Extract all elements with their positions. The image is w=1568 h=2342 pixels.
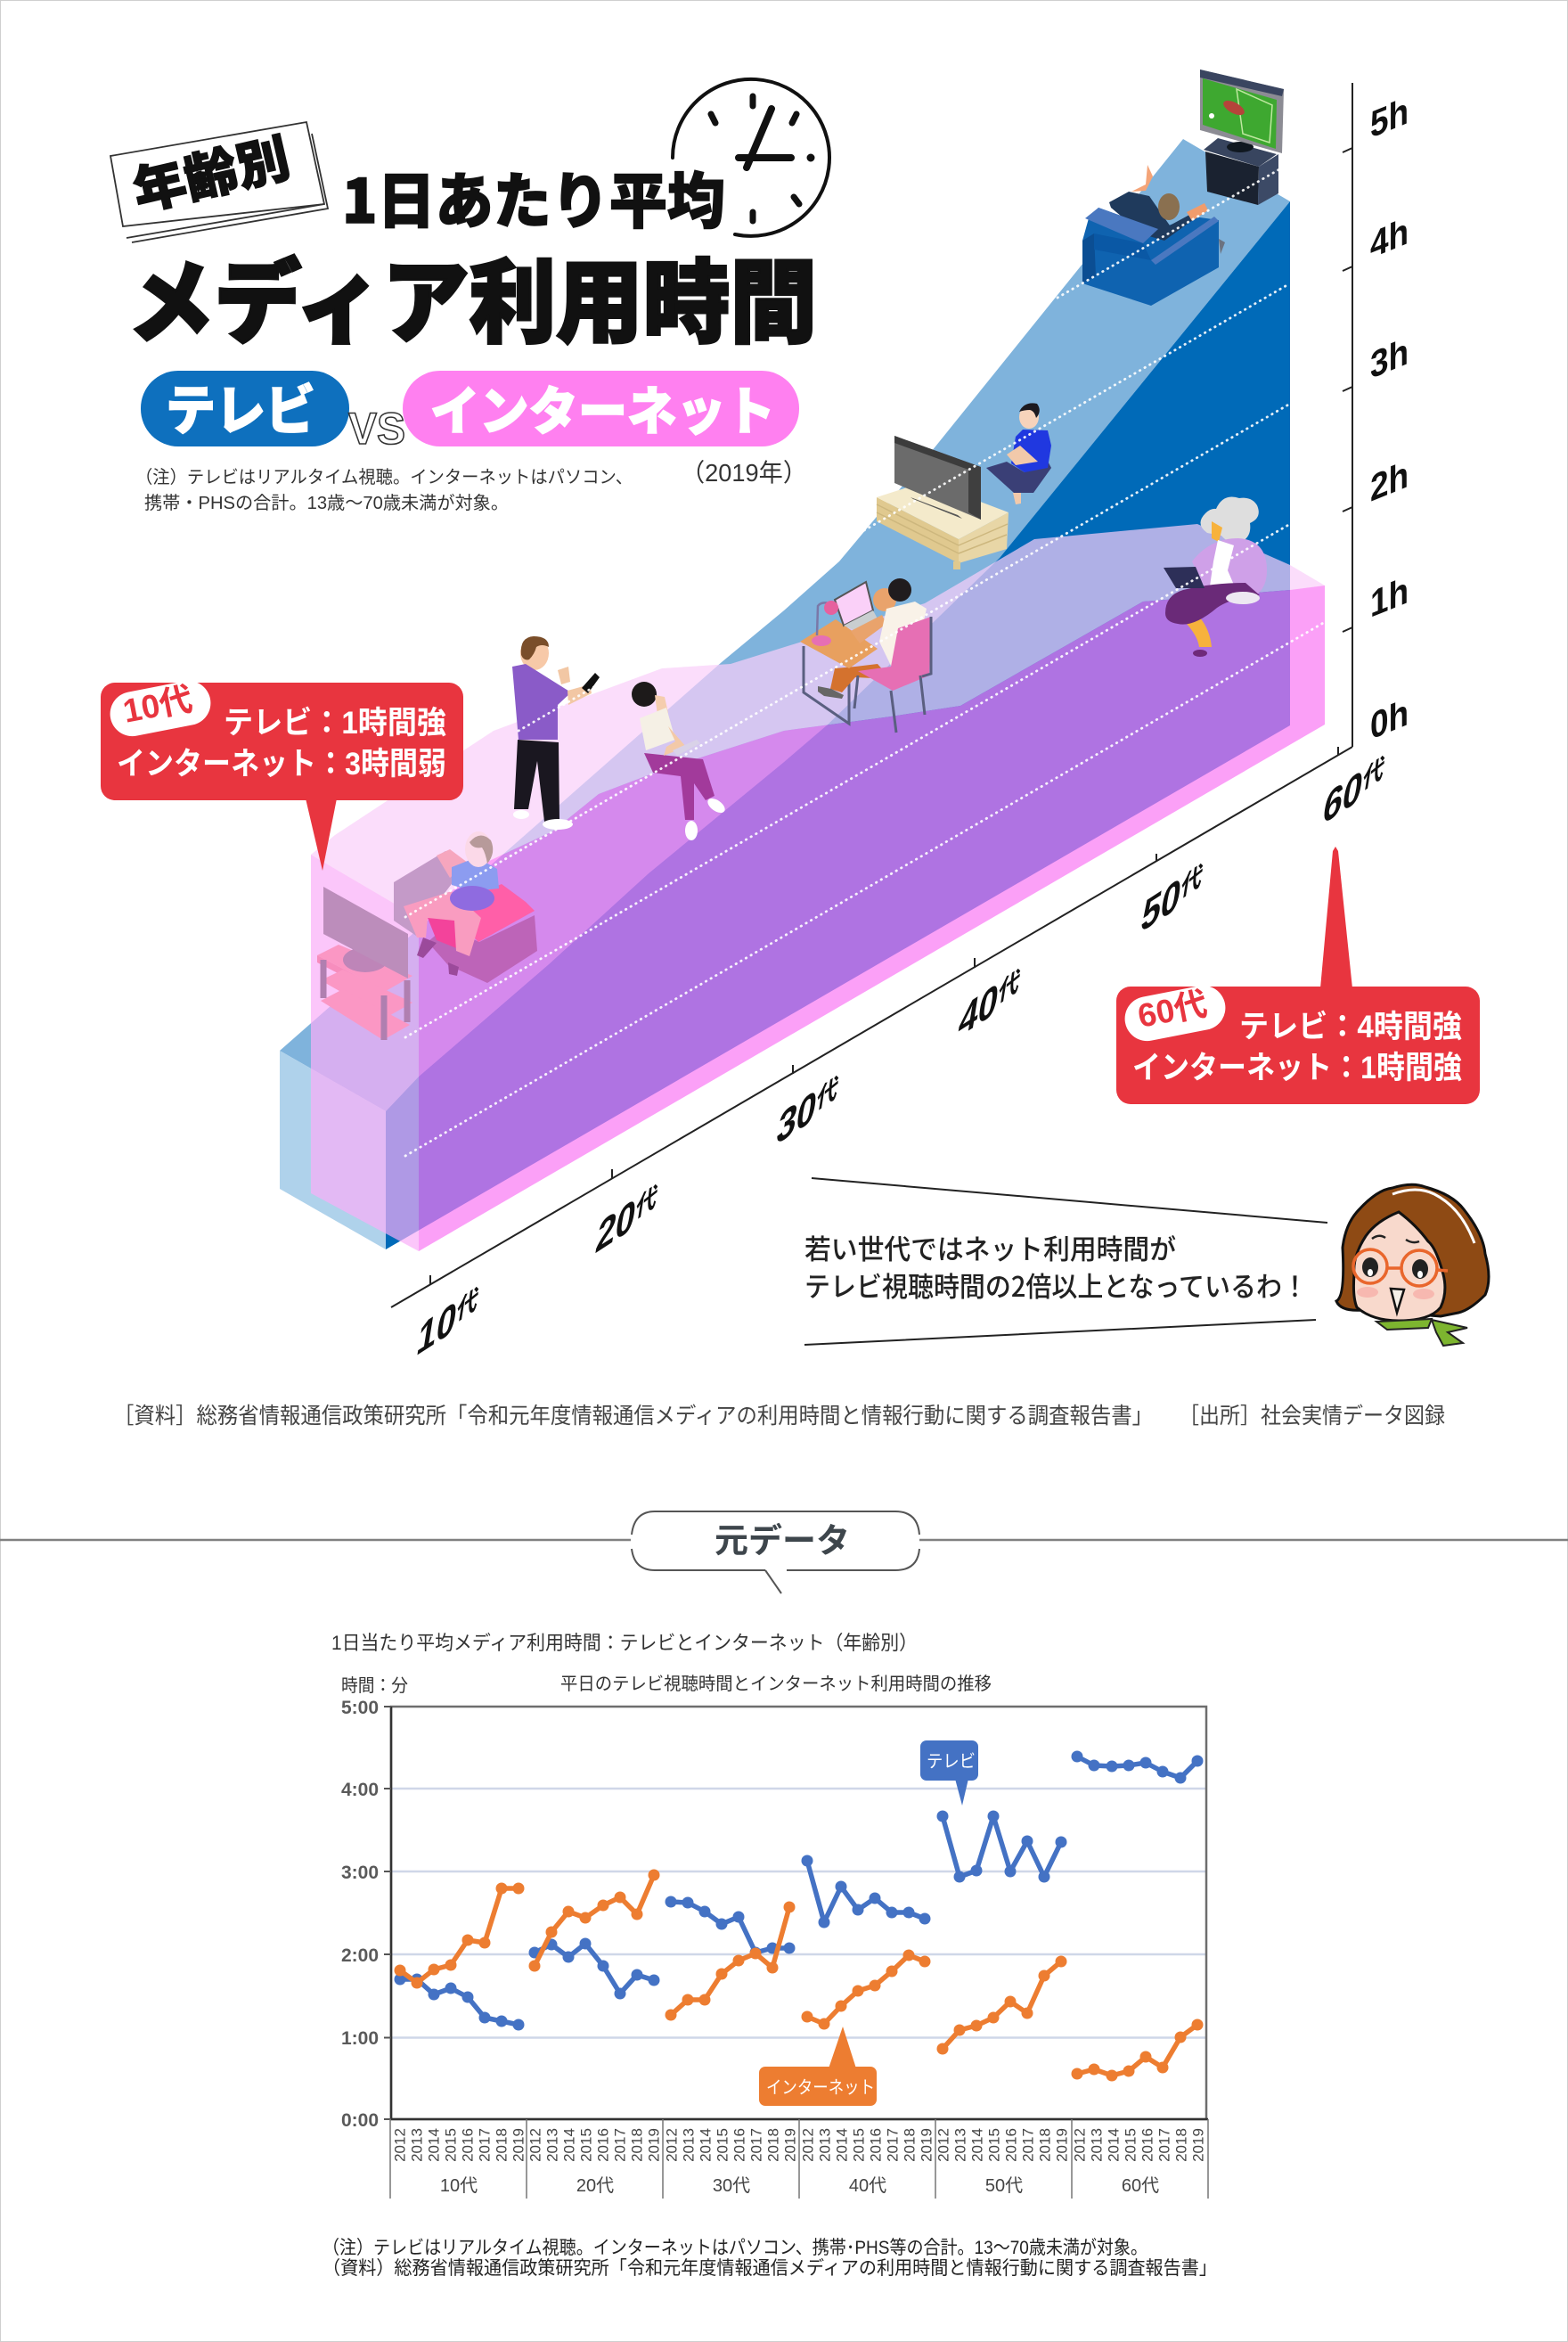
year labels: 2018	[629, 2128, 645, 2162]
year labels: 2018	[494, 2128, 510, 2162]
callout: 10代: インターネット：3時間弱	[117, 747, 446, 782]
year labels: 2015	[1123, 2128, 1139, 2162]
source chart title: 1日当たり平均メディア利用時間：テレビとインターネット（年齢別）	[331, 1632, 918, 1654]
y axis labels: 0:00	[341, 2110, 379, 2131]
area: TV front face	[386, 201, 1290, 1249]
icon: clock	[673, 79, 829, 236]
x axis: age groups: 代	[1360, 752, 1386, 797]
x axis: age groups: 50	[1138, 867, 1185, 943]
year labels: 2019	[510, 2128, 527, 2162]
year labels: 2014	[561, 2128, 577, 2162]
series: internet	[400, 1875, 1197, 2076]
year labels: 2012	[392, 2128, 408, 2162]
icon: woman with glasses	[1336, 1184, 1489, 1346]
y axis labels: 5:00	[341, 1698, 379, 1718]
speech bubble: comment: テレビ視聴時間の2倍以上となっているわ！	[804, 1265, 1308, 1305]
badge: 年齢別: 年齢別	[125, 117, 296, 225]
area: TV end face	[280, 1051, 386, 1249]
y axis labels: 1:00	[341, 2028, 379, 2049]
year labels: 2015	[715, 2128, 731, 2162]
tag: internet: インターネット	[766, 2077, 875, 2098]
year labels: 2019	[918, 2128, 935, 2162]
footnotes: （注）テレビはリアルタイム視聴。インターネットはパソコン、携帯･PHS等の合計。13～70歳未満が対象。	[323, 2238, 1147, 2258]
x axis: age groups: 30	[773, 1079, 821, 1155]
tag: TV	[920, 1740, 978, 1806]
y axis: hours: 2h	[1370, 453, 1409, 510]
x axis: age groups: 代	[633, 1181, 659, 1225]
grid lines	[405, 169, 1325, 1156]
badge: 年齢別	[110, 117, 328, 242]
year labels: 2017	[748, 2128, 764, 2162]
age group labels	[440, 2175, 1159, 2196]
age group labels: 20代	[576, 2175, 614, 2196]
callout: 10代	[101, 677, 463, 871]
y axis: hours: 4h	[1370, 209, 1409, 266]
y axis: hours: 1h	[1370, 569, 1409, 626]
year labels: 2015	[577, 2128, 595, 2162]
year labels: 2012	[663, 2128, 681, 2162]
tag: internet	[759, 2027, 877, 2106]
area: TV surface	[280, 139, 1290, 1111]
title line 1: 1日あたり平均	[342, 152, 725, 241]
y axis: hours	[1343, 83, 1409, 748]
year labels: 2015	[850, 2128, 868, 2162]
year labels: 2017	[611, 2128, 629, 2162]
legend: VS: VS	[348, 404, 405, 454]
chart: isometric area chart of TV vs internet	[280, 139, 1325, 1251]
year labels: 2018	[1172, 2128, 1190, 2162]
year labels: 2014	[697, 2128, 715, 2162]
callout: 60代: 60代	[1135, 986, 1210, 1035]
age group labels: 40代	[849, 2175, 886, 2196]
y axis: hours: 0h	[1370, 691, 1409, 748]
line chart	[341, 1698, 1208, 2199]
legend pill: internet: インターネット	[430, 370, 775, 445]
year labels: 2016	[731, 2128, 748, 2162]
year labels: 2016	[868, 2128, 884, 2162]
year labels: 2013	[681, 2128, 697, 2162]
callout: 10代: 10代	[120, 681, 195, 730]
year labels: 2019	[782, 2128, 798, 2162]
x axis: age groups	[391, 746, 1388, 1366]
year labels: 2016	[595, 2128, 611, 2162]
illustration: person in armchair watching football on TV	[1082, 70, 1284, 306]
divider and heading: 元データ	[0, 1511, 1568, 1593]
tag: TV: テレビ	[927, 1751, 976, 1772]
year labels: 2016	[1139, 2128, 1156, 2162]
year labels: 2014	[969, 2128, 985, 2162]
source line: ［出所］社会実情データ図録	[1179, 1404, 1445, 1429]
year labels: 2019	[645, 2128, 663, 2162]
y axis labels: 3:00	[341, 1863, 379, 1883]
source line: ［資料］総務省情報通信政策研究所「令和元年度情報通信メディアの利用時間と情報行動に関する調査報告書」	[113, 1404, 1153, 1429]
year labels: 2014	[1105, 2128, 1123, 2162]
year labels: 2014	[834, 2128, 850, 2162]
year labels: 2017	[476, 2128, 494, 2162]
y axis: hours: 3h	[1370, 330, 1409, 387]
year labels: 2015	[442, 2128, 460, 2162]
footnotes	[323, 2238, 1217, 2279]
illustration: man standing with phone	[512, 636, 600, 830]
x axis: age groups: 10	[413, 1290, 461, 1366]
year labels: 2013	[951, 2128, 969, 2162]
age group labels: 10代	[440, 2175, 478, 2196]
year labels: 2019	[1190, 2128, 1206, 2162]
y axis: hours: 5h	[1370, 89, 1409, 146]
year labels: 2019	[1053, 2128, 1071, 2162]
series: TV	[400, 1756, 1197, 2025]
note: （注）テレビはリアルタイム視聴。インターネットはパソコン、	[135, 467, 633, 487]
year labels	[392, 2128, 1206, 2162]
year labels: 2017	[1019, 2128, 1037, 2162]
year labels: 2014	[426, 2128, 442, 2162]
area: internet front face	[419, 586, 1325, 1251]
legend pill: TV: テレビ	[166, 368, 315, 446]
year labels: 2013	[408, 2128, 426, 2162]
divider and heading: 元データ: 元データ	[715, 1513, 850, 1562]
x axis: age groups: 代	[1179, 860, 1205, 905]
illustration: man at desk with laptop	[800, 578, 931, 733]
year labels: 2012	[527, 2128, 543, 2162]
x axis: age groups: 40	[955, 972, 1002, 1048]
x axis: age groups: 20	[592, 1188, 640, 1264]
year labels: 2016	[460, 2128, 476, 2162]
callout: 60代: インターネット：1時間強	[1132, 1051, 1462, 1085]
title line 2: メディア利用時間	[127, 231, 817, 362]
year labels: 2017	[1156, 2128, 1172, 2162]
y axis labels: 2:00	[341, 1945, 379, 1966]
year labels: 2018	[1037, 2128, 1053, 2162]
source chart unit: 時間：分	[341, 1675, 408, 1696]
group dividers	[390, 2119, 1208, 2199]
age group labels: 50代	[985, 2175, 1023, 2196]
area: internet surface	[311, 524, 1325, 918]
age group labels: 30代	[713, 2175, 750, 2196]
y axis labels: 4:00	[341, 1780, 379, 1800]
year labels: 2018	[764, 2128, 782, 2162]
year labels: 2013	[543, 2128, 561, 2162]
illustration: grandmother with laptop	[1164, 497, 1267, 657]
note	[135, 467, 633, 513]
year labels: 2015	[985, 2128, 1003, 2162]
age group labels: 60代	[1122, 2175, 1159, 2196]
callout: 60代: テレビ：4時間強	[1239, 1010, 1462, 1044]
x axis: age groups: 60	[1319, 759, 1367, 835]
note: 携帯・PHSの合計。13歳～70歳未満が対象。	[144, 493, 509, 513]
x axis: age groups: 代	[814, 1072, 840, 1117]
illustration: woman sitting with tablet	[632, 682, 727, 840]
year: （2019年）	[681, 459, 807, 487]
year labels: 2016	[1003, 2128, 1019, 2162]
x axis: age groups: 代	[454, 1283, 480, 1328]
y axis labels	[341, 1698, 379, 2131]
callout: 60代	[1116, 847, 1480, 1104]
area: internet end face	[311, 855, 419, 1251]
illustration: man sitting cross-legged watching TV	[877, 403, 1051, 569]
speech bubble: comment: 若い世代ではネット利用時間が	[804, 1227, 1176, 1267]
source chart subtitle: 平日のテレビ視聴時間とインターネット利用時間の推移	[560, 1674, 992, 1694]
speech bubble: comment	[804, 1178, 1327, 1345]
x axis: age groups: 代	[996, 965, 1022, 1010]
year labels: 2017	[884, 2128, 902, 2162]
illustration: teen watching TV on sofa (tinted)	[317, 831, 537, 1040]
year labels: 2013	[1089, 2128, 1105, 2162]
year labels: 2018	[902, 2128, 918, 2162]
footnotes: （資料）総務省情報通信政策研究所「令和元年度情報通信メディアの利用時間と情報行動に関する調査報告書」	[323, 2258, 1217, 2279]
year labels: 2012	[800, 2128, 816, 2162]
callout: 10代: テレビ：1時間強	[224, 706, 446, 741]
year labels: 2012	[935, 2128, 951, 2162]
year labels: 2012	[1071, 2128, 1089, 2162]
year labels: 2013	[816, 2128, 834, 2162]
